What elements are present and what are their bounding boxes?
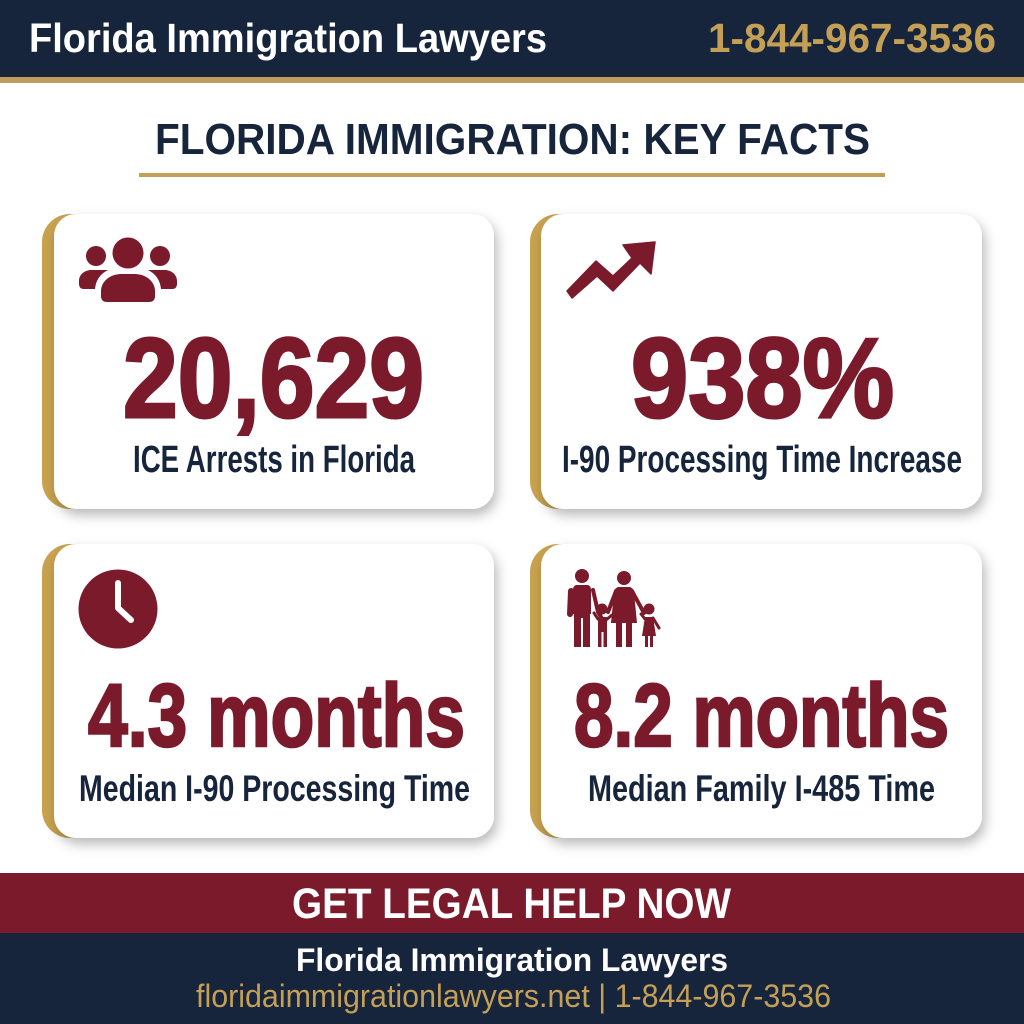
label: I-90 median: Median I-90 Processing Time <box>79 768 470 809</box>
call to action banner <box>0 873 1024 934</box>
footer <box>0 933 1024 1024</box>
icon: rising arrow <box>567 242 655 298</box>
title: FLORIDA IMMIGRATION: KEY FACTS <box>155 115 870 164</box>
header bar <box>0 0 1024 83</box>
icon: family <box>570 569 659 647</box>
footer firm name: Florida Immigration Lawyers <box>296 942 728 978</box>
panel: I-90 increase <box>530 214 982 509</box>
panel: I-90 median time <box>42 544 494 838</box>
header phone number: 1-844-967-3536 <box>708 15 996 61</box>
header firm name: Florida Immigration Lawyers <box>29 15 547 61</box>
footer contact line: floridaimmigrationlawyers.net | 1-844-967-3536 <box>196 978 831 1014</box>
icon: group of people <box>79 238 177 302</box>
statistic: 20,629: 20,629 <box>123 315 424 441</box>
statistic: 4.3 months: 4.3 months <box>88 665 465 765</box>
label: family median: Median Family I-485 Time <box>588 768 935 809</box>
panel: ICE arrests <box>42 214 494 509</box>
label: ICE arrests: ICE Arrests in Florida <box>133 439 416 481</box>
statistic: 938%: 938% <box>631 315 894 441</box>
icon: clock <box>78 570 158 648</box>
panel: family I-485 time <box>530 544 982 838</box>
call to action banner: GET LEGAL HELP NOW <box>292 880 731 928</box>
